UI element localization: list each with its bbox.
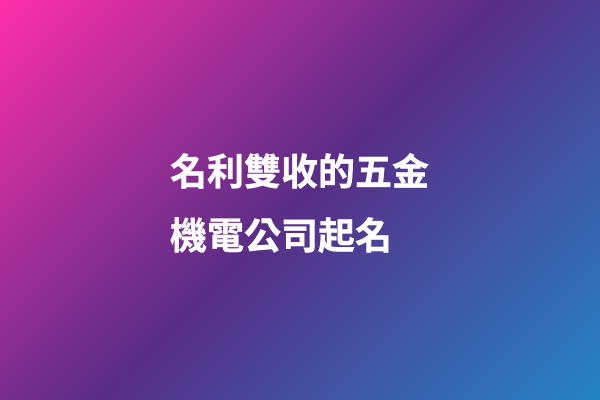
title — [170, 152, 429, 257]
title line 2: 機電公司起名 — [170, 216, 392, 257]
title line 1: 名利雙收的五金 — [170, 152, 429, 193]
